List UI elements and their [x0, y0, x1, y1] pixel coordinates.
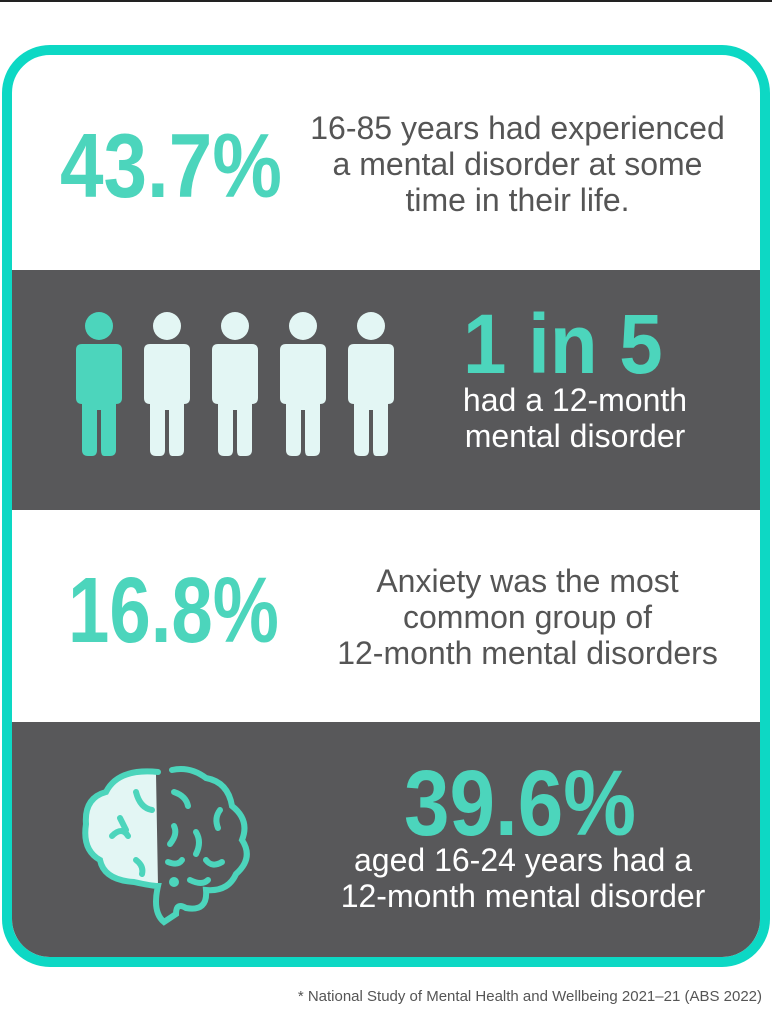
text: 12-month: had a 12-month [463, 382, 687, 418]
text: 12-month: mental disorder [465, 418, 685, 454]
stat 43.7%: 43.7% [60, 116, 282, 217]
text: lifetime: a mental disorder at some [333, 146, 702, 182]
text: youth [341, 842, 705, 914]
stat 1 in 5: 1 in 5 [463, 297, 663, 391]
text: anxiety: common group of [403, 599, 652, 635]
text: anxiety: 12-month mental disorders [337, 635, 718, 671]
panel: dark band 2 [12, 722, 760, 962]
text: anxiety: Anxiety was the most [376, 563, 679, 599]
panel: dark band 1 [12, 270, 760, 510]
text: youth: 12-month mental disorder [341, 878, 705, 914]
text: 12-month [463, 382, 687, 454]
text: lifetime [310, 110, 725, 218]
icon: people [76, 312, 394, 456]
footnote: * National Study of Mental Health and Wellbeing 2021–21 (ABS 2022) [298, 988, 762, 1005]
text: lifetime: 16-85 years had experienced [310, 110, 725, 146]
stat 16.8%: 16.8% [68, 558, 279, 662]
text: youth: aged 16-24 years had a [354, 842, 692, 878]
text: lifetime: time in their life. [405, 182, 630, 218]
text: anxiety [337, 563, 718, 671]
icon: brain [82, 766, 250, 926]
stat 39.6%: 39.6% [404, 751, 636, 855]
